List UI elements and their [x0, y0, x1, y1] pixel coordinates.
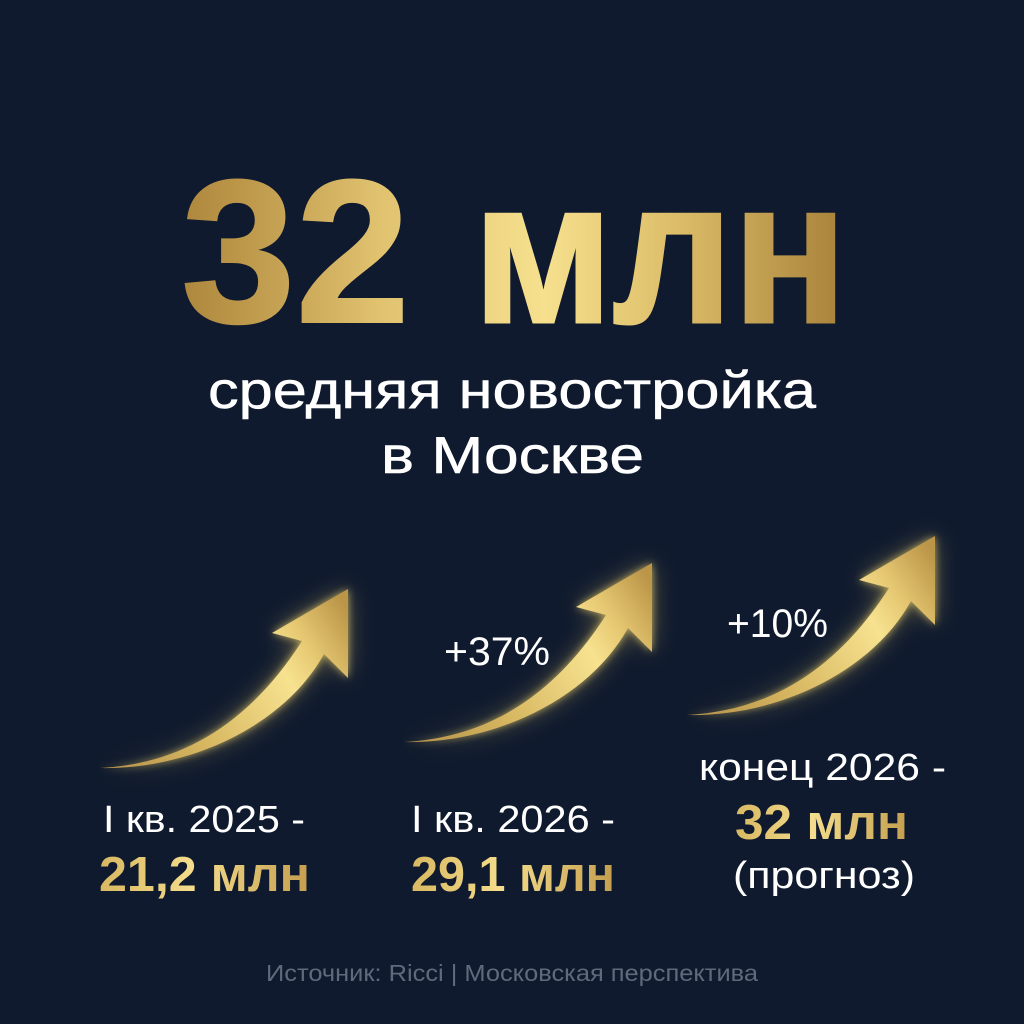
column: 2026: 29,1 млн [411, 848, 615, 902]
column: 2025: I кв. 2025 - [103, 799, 305, 841]
arrow: 2026 [404, 563, 652, 742]
column: 2025: 21,2 млн [99, 848, 310, 902]
subtitle [208, 362, 816, 485]
growth label: +10%: +10% [727, 602, 828, 646]
arrow: 2025 [100, 589, 348, 768]
arrow: end of 2026 [687, 536, 935, 715]
column: 2025 [99, 799, 310, 902]
column: forecast: 32 млн [735, 796, 908, 850]
growth label: +37%: +37% [444, 630, 550, 674]
column: 2026 [411, 799, 615, 902]
title: 32 млн [181, 138, 847, 366]
column: forecast [699, 747, 946, 897]
title: 32 млн: 32 [181, 138, 410, 366]
column: 2026: I кв. 2026 - [411, 799, 615, 841]
subtitle: в Москве [381, 427, 644, 485]
source: Источник: Ricci | Московская перспектива [266, 960, 758, 986]
title: 32 млн: млн [473, 138, 847, 366]
column: forecast: (прогноз) [733, 855, 915, 897]
column: forecast: конец 2026 - [699, 747, 946, 789]
subtitle: средняя новостройка [208, 362, 816, 420]
